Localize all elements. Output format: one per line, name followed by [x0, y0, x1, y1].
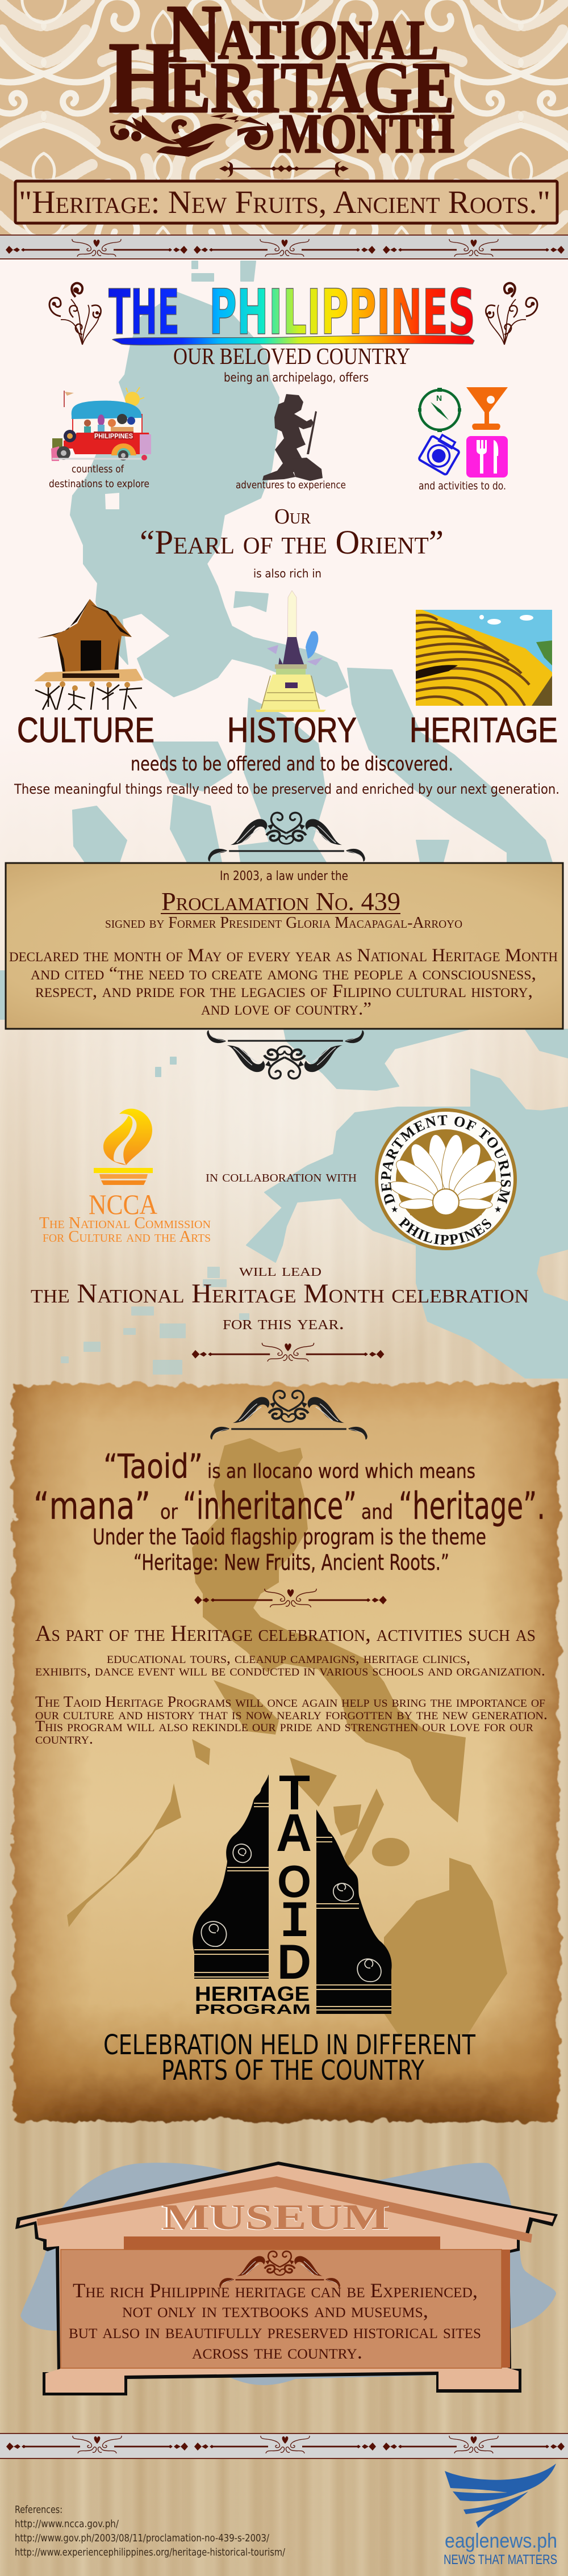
heading: activities intro: As part of the Heritage celebration, activities such as — [35, 1620, 536, 1646]
labels: culture, history, heritage: CULTURE — [17, 711, 154, 750]
text: in collaboration with: in collaboration with — [206, 1168, 357, 1186]
text: program description: The Taoid Heritage Programs will once again help us bring the importance of — [35, 1693, 545, 1710]
icon: jeepney: PHILIPPINES — [94, 432, 133, 440]
text: program description: our culture and history that is now nearly forgotten by the new generation. — [35, 1706, 548, 1723]
text: Taoid definition: “inheritance” — [183, 1484, 357, 1528]
header panel: damask wallpaper — [0, 0, 568, 234]
divider: heart — [192, 1343, 384, 1362]
wordmark: TAOID: I — [279, 1894, 310, 1952]
logo: Taoid Heritage Program — [193, 1766, 392, 2017]
rainbow underline — [112, 336, 474, 345]
icon: NCCA flame — [103, 1109, 152, 1165]
text: Taoid definition: and — [361, 1501, 393, 1524]
text: Taoid definition: “Taoid” — [103, 1447, 203, 1486]
heading: MUSEUM: MUSEUM — [162, 2197, 390, 2237]
labels: culture, history, heritage — [17, 711, 558, 750]
labels: culture, history, heritage: HISTORY — [227, 711, 357, 750]
ornament: plaque — [219, 2251, 340, 2288]
title: National Heritage Month — [108, 0, 454, 165]
logo: Department of Tourism seal: PHILIPPINES — [398, 1217, 491, 1245]
text: plaque body: The rich Philippine heritage can be Experienced, — [73, 2279, 478, 2302]
icon: Rizal monument — [256, 590, 326, 712]
illustration: museum — [15, 2162, 558, 2395]
text: Our: Our — [274, 505, 311, 529]
ornament below proclamation — [207, 1031, 364, 1079]
rainbow wordmark — [108, 276, 475, 349]
text: Taoid definition — [34, 1447, 545, 1575]
caption: celebration — [103, 2029, 476, 2087]
logo: Department of Tourism seal — [375, 1108, 517, 1250]
parchment sheet — [14, 1384, 559, 2121]
text: will lead: will lead — [239, 1261, 321, 1280]
logo: NCCA — [39, 1109, 211, 1246]
wordmark: TAOID: A — [276, 1803, 312, 1862]
text: needs to be offered: needs to be offered and to be discovered. — [131, 753, 453, 776]
heading: Pearl of the Orient: “Pearl of the Orient” — [140, 523, 444, 561]
text: commission name: for Culture and the Arts — [43, 1228, 211, 1246]
logo: Department of Tourism seal: DEPARTMENT OF TOURISM — [381, 1115, 511, 1205]
text: declaration body: declared the month of May of every year as National Heritage Month — [9, 945, 558, 966]
ornament above proclamation — [208, 812, 365, 861]
divider strip: top — [0, 234, 568, 259]
text: adventures caption: adventures to experience — [236, 479, 346, 491]
divider: heart — [194, 1589, 387, 1607]
icon: fork and knife — [466, 436, 508, 477]
text: references: http://www.experiencephilippines.org/heritage-historical-tourism/ — [15, 2546, 286, 2558]
wordmark: TAOID — [276, 1766, 312, 1989]
title: National Heritage Month: MONTH — [279, 103, 454, 165]
wordmark: Heritage Program: HERITAGE — [195, 1982, 310, 2005]
icons: activities grid — [418, 387, 508, 477]
blue-grey blob — [20, 2163, 556, 2385]
heading: National Heritage Month celebration: the National Heritage Month celebration — [31, 1279, 529, 1309]
caption: celebration: CELEBRATION HELD IN DIFFERENT — [103, 2029, 476, 2061]
icon: hiker silhouette — [262, 394, 323, 481]
text: program description: This program will also rekindle our pride and strengthen our love for our — [35, 1718, 533, 1735]
text: plaque body: not only in textbooks and museums, — [122, 2299, 428, 2322]
wordmark: Heritage Program — [195, 1982, 311, 2017]
text: destinations caption: destinations to explore — [49, 478, 149, 490]
icon: cocktail — [466, 387, 508, 430]
heading: The Philippines — [49, 276, 537, 349]
spirals — [201, 1844, 381, 1982]
text: in 2003: In 2003, a law under the — [220, 869, 348, 883]
left bulol shape — [193, 1774, 269, 1979]
icon: camera — [419, 431, 462, 475]
text: destinations caption: countless of — [72, 463, 124, 475]
right bulol shape — [316, 1810, 392, 2014]
text: commission name: The National Commission — [39, 1214, 211, 1232]
roof shadow band — [37, 2176, 532, 2243]
text: NCCA: NCCA — [89, 1188, 157, 1220]
heading: MUSEUM: MUSEUM — [161, 2197, 390, 2238]
logo: Department of Tourism seal: ★ — [391, 1205, 398, 1214]
text: commission name — [39, 1214, 211, 1246]
text: plaque body — [69, 2279, 481, 2363]
text: declaration body: and cited “the need to create among the people a consciousness, — [31, 964, 536, 984]
text: declaration body — [9, 945, 558, 1019]
text: our beloved country: OUR BELOVED COUNTRY — [173, 343, 410, 369]
divider: small flourish line — [219, 161, 349, 177]
text: is also rich in: is also rich in — [253, 567, 321, 580]
text: program description: country. — [35, 1730, 93, 1747]
text: references — [15, 2504, 286, 2558]
building outline and roof — [15, 2162, 558, 2395]
text: destinations caption — [49, 463, 149, 490]
logo: Department of Tourism seal: ★ — [494, 1205, 502, 1214]
tagline banner: "Heritage: New Fruits, Ancient Roots." — [19, 185, 550, 220]
image: rice terraces — [416, 610, 552, 706]
panel: Taoid parchment — [14, 1384, 559, 2121]
title: National Heritage Month: ERITAGE — [169, 48, 454, 128]
icon: compass: N — [436, 393, 442, 403]
caption: celebration: PARTS OF THE COUNTRY — [161, 2055, 425, 2087]
heading: Proclamation No. 439: Proclamation No. 439 — [161, 887, 400, 916]
pediment band — [124, 2236, 440, 2250]
text: declaration body: and love of country.” — [201, 999, 371, 1019]
text: eaglenews.ph: eaglenews.ph — [445, 2529, 557, 2552]
text: activities list: educational tours, cleanup campaigns, heritage clinics, — [107, 1649, 470, 1666]
wordmark: Heritage Program: PROGRAM — [195, 2002, 311, 2017]
panel: proclamation — [6, 863, 563, 1029]
text: activities list: exhibits, dance event will be conducted in various schools and organization. — [35, 1662, 545, 1679]
icon: title flourish — [110, 114, 273, 157]
rainbow wordmark: THE — [108, 276, 179, 349]
text: being an archipelago: being an archipelago, offers — [224, 371, 369, 384]
text: signed by: signed by Former President Gloria Macapagal-Arroyo — [105, 914, 462, 932]
plaque — [61, 2250, 502, 2368]
wordmark: TAOID: T — [279, 1766, 310, 1820]
text: program description — [35, 1693, 548, 1747]
text: activities list — [35, 1649, 545, 1679]
text: activities caption: and activities to do. — [419, 480, 506, 492]
underline — [161, 913, 400, 914]
text: plaque body: but also in beautifully preserved historical sites — [69, 2320, 481, 2343]
text: plaque body: across the country. — [192, 2340, 362, 2363]
stripes — [194, 1803, 391, 2010]
text: references: http://www.ncca.gov.ph/ — [15, 2518, 119, 2530]
text: declaration body: respect, and pride for the legacies of Filipino cultural history, — [35, 981, 533, 1002]
text: Taoid definition: or — [160, 1501, 178, 1524]
divider strip: bottom — [0, 2433, 568, 2459]
title: National Heritage Month: ATIONAL — [218, 10, 438, 71]
wordmark: TAOID: D — [277, 1935, 311, 1989]
text: Taoid definition: is an Ilocano word which means — [207, 1460, 475, 1483]
icon: eagle wing — [445, 2464, 556, 2528]
ornament: parchment top — [210, 1390, 367, 1439]
icon: jeepney — [51, 387, 151, 461]
icon: nipa hut — [34, 599, 143, 710]
icon: left swirl — [49, 283, 101, 345]
text: Taoid definition: “Heritage: New Fruits, Ancient Roots.” — [133, 1550, 449, 1575]
logo: Eagle News — [444, 2464, 557, 2567]
background map: Philippines in teal — [0, 261, 568, 1378]
parchment map: Philippines — [67, 1438, 507, 2035]
icon: compass — [418, 388, 461, 432]
text: for this year: for this year. — [223, 1313, 344, 1334]
title: National Heritage Month: H — [108, 21, 177, 134]
side shadow — [502, 2250, 510, 2368]
text: references: References: — [15, 2504, 62, 2516]
text: references: http://www.gov.ph/2003/08/11/proclamation-no-439-s-2003/ — [15, 2532, 270, 2544]
wordmark: TAOID: O — [277, 1856, 311, 1907]
text: Taoid definition: “mana” — [34, 1484, 151, 1528]
icon: right swirl — [486, 283, 537, 345]
